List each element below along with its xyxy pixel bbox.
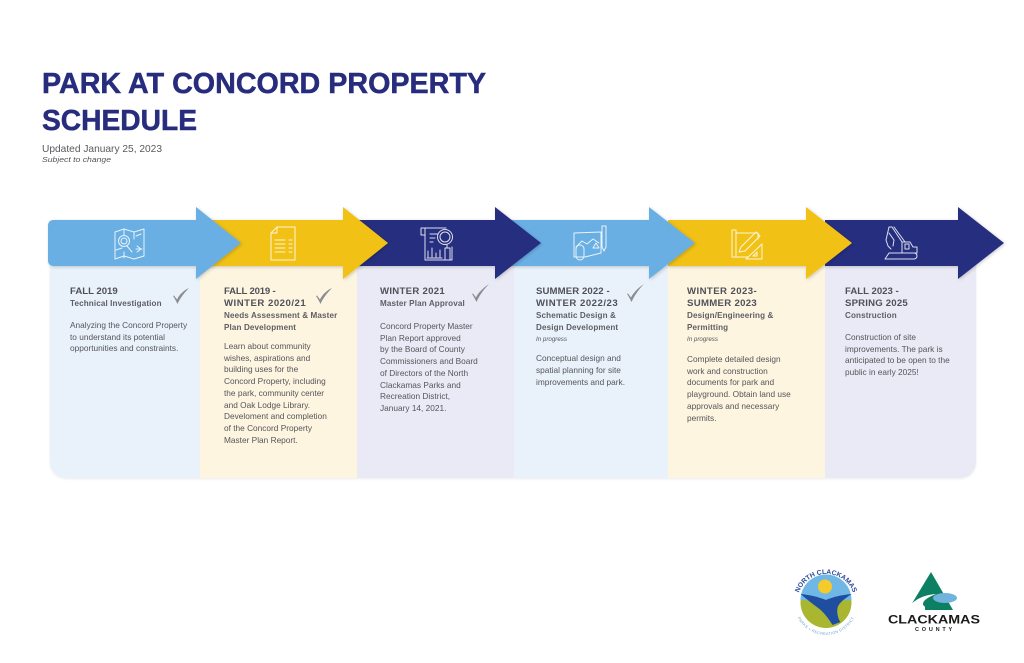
column 3 text: Clackamas Parks and bbox=[380, 380, 461, 390]
arrow 6: construction bbox=[825, 207, 1004, 279]
column 2 text: FALL 2019 - bbox=[224, 286, 276, 297]
column 5 text: approvals and necessary bbox=[687, 401, 780, 411]
column 6 text: FALL 2023 - bbox=[845, 286, 899, 297]
column 4 text: Conceptual design and bbox=[536, 353, 621, 363]
update note: Subject to change bbox=[42, 155, 111, 164]
logo: Clackamas County: CLACKAMAS bbox=[888, 612, 980, 626]
column 3 text: January 14, 2021. bbox=[380, 403, 446, 413]
column 4 text: SUMMER 2022 - bbox=[536, 286, 610, 297]
update note bbox=[42, 144, 162, 164]
column 6 text: Construction of site bbox=[845, 332, 916, 342]
column 2 text: and Oak Lodge Library. bbox=[224, 400, 310, 410]
arrow 5: design engineering bbox=[668, 207, 852, 279]
logo: Clackamas County bbox=[888, 572, 980, 633]
arrow 4: schematic design bbox=[510, 207, 695, 279]
column 5 text: Complete detailed design bbox=[687, 354, 781, 364]
column 2 text: of the Concord Property bbox=[224, 423, 313, 433]
check 2 bbox=[316, 288, 332, 304]
icon: drawing with pencil and set square bbox=[732, 230, 762, 259]
column 6 text: public in early 2025! bbox=[845, 367, 919, 377]
column 5 text bbox=[686, 286, 791, 423]
column 1 text: Analyzing the Concord Property bbox=[70, 320, 188, 330]
column 4 text: WINTER 2022/23 bbox=[536, 298, 618, 309]
column 5 text: work and construction bbox=[686, 366, 768, 376]
column 3 text: Master Plan Approval bbox=[380, 299, 465, 308]
icon: report and magnifier bbox=[421, 228, 452, 260]
column 6 text: Construction bbox=[845, 311, 897, 320]
column 2 text: building uses for the bbox=[224, 364, 299, 374]
arrow 1: technical investigation bbox=[48, 207, 241, 279]
column 4 text: Schematic Design & bbox=[536, 311, 616, 320]
column 1 text: opportunities and constraints. bbox=[70, 343, 178, 353]
column 2 text: Needs Assessment & Master bbox=[224, 311, 338, 320]
column 5 text: permits. bbox=[687, 413, 717, 423]
column 2 text: the park, community center bbox=[224, 388, 324, 398]
column 3 text: Commissioners and Board bbox=[380, 356, 478, 366]
column 3 text: of Directors of the North bbox=[380, 368, 468, 378]
column 5 text: In progress bbox=[687, 336, 718, 343]
check 1 bbox=[173, 288, 189, 304]
column 4 text: In progress bbox=[536, 336, 567, 343]
column 5 text: Design/Engineering & bbox=[687, 311, 774, 320]
check 4 bbox=[627, 284, 644, 302]
column 2 text: Concord Property, including bbox=[224, 376, 326, 386]
column 1 text: Technical Investigation bbox=[70, 299, 162, 308]
logo: North Clackamas Parks and Recreation District: PARKS + RECREATION DISTRICT bbox=[798, 616, 854, 635]
column 6 text: improvements. The park is bbox=[845, 344, 943, 354]
column 3 text: Plan Report approved bbox=[380, 333, 461, 343]
icon: plan with pencil bbox=[574, 226, 606, 260]
column 5 text: documents for park and bbox=[687, 377, 775, 387]
logo: North Clackamas Parks and Recreation District: NORTH CLACKAMAS bbox=[794, 569, 857, 592]
column 2 text: WINTER 2020/21 bbox=[224, 298, 306, 309]
column 6 text: anticipated to be open to the bbox=[845, 355, 950, 365]
column 2 text bbox=[223, 286, 338, 445]
title bbox=[42, 68, 486, 137]
column 3 text: WINTER 2021 bbox=[380, 286, 445, 297]
title: PARK AT CONCORD PROPERTY bbox=[42, 68, 486, 100]
logo: North Clackamas Parks and Recreation District bbox=[794, 569, 857, 635]
column 3 text: Recreation District, bbox=[380, 391, 450, 401]
column 1 text: FALL 2019 bbox=[70, 286, 118, 297]
column 1 text: to understand its potential bbox=[70, 332, 165, 342]
column 5 text: Permitting bbox=[687, 323, 728, 332]
panel backgrounds bbox=[50, 264, 976, 479]
column 3 text: Concord Property Master bbox=[380, 321, 473, 331]
column 4 text: Design Development bbox=[536, 323, 618, 332]
column 5 text: WINTER 2023- bbox=[687, 286, 757, 297]
icon: excavator bbox=[885, 227, 917, 259]
column 3 text bbox=[380, 286, 478, 413]
icon: map with magnifier bbox=[115, 229, 144, 259]
column 6 text: SPRING 2025 bbox=[845, 298, 908, 309]
column 4 text: spatial planning for site bbox=[536, 365, 621, 375]
title: SCHEDULE bbox=[42, 105, 197, 137]
column 2 text: Plan Development bbox=[224, 323, 296, 332]
column 2 text: Learn about community bbox=[224, 341, 312, 351]
check 3 bbox=[472, 284, 489, 302]
column 4 text bbox=[536, 286, 625, 387]
column 4 text: improvements and park. bbox=[536, 377, 625, 387]
update note: Updated January 25, 2023 bbox=[42, 144, 162, 155]
arrow 2: needs assessment bbox=[200, 207, 388, 279]
logo: Clackamas County: COUNTY bbox=[915, 627, 955, 633]
column 5 text: SUMMER 2023 bbox=[687, 298, 757, 309]
icon: document bbox=[271, 227, 295, 260]
column 5 text: playground. Obtain land use bbox=[687, 389, 791, 399]
column 2 text: wishes, aspirations and bbox=[223, 353, 311, 363]
column 1 text bbox=[70, 286, 188, 353]
column 6 text bbox=[845, 286, 950, 377]
arrow 3: master plan approval bbox=[357, 207, 541, 279]
column 3 text: by the Board of County bbox=[380, 344, 466, 354]
column 2 text: Master Plan Report. bbox=[224, 435, 298, 445]
column 2 text: Develoment and completion bbox=[224, 411, 327, 421]
